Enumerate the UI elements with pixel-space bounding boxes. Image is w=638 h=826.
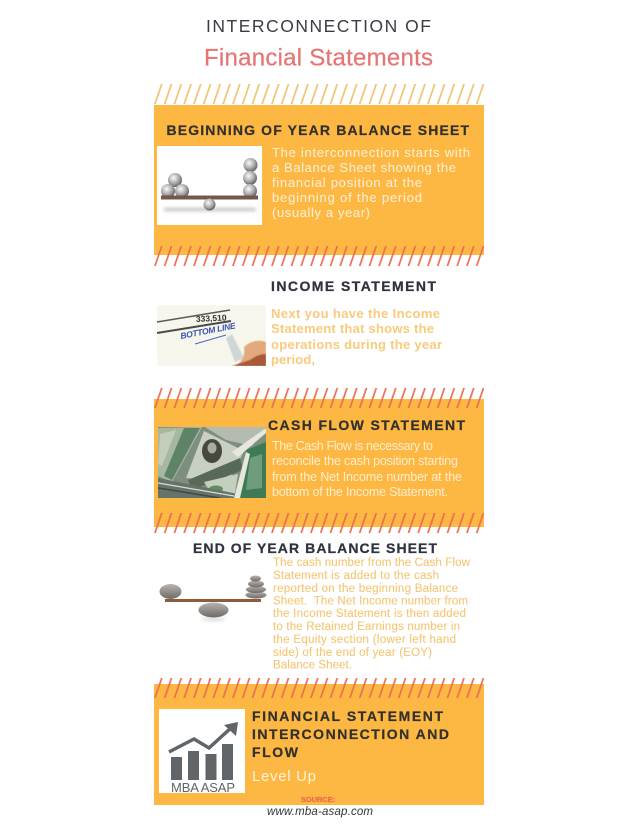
image: stones on a balance — [160, 576, 266, 621]
text: beginning balance sheet description: a Balance Sheet showing the — [272, 160, 456, 175]
heading: financial statement interconnection and flow — [252, 708, 449, 760]
text: income statement description: period, — [271, 352, 315, 367]
text: beginning balance sheet description: financial position at the — [272, 175, 422, 190]
text: cash flow description: The Cash Flow is necessary to — [272, 439, 433, 453]
panel: end of year balance sheet — [160, 540, 471, 672]
logo: MBA ASAP: MBA ASAP — [171, 780, 235, 795]
text: income statement description: Statement that shows the — [271, 321, 434, 336]
text: income statement description — [271, 306, 442, 367]
text: end of year balance sheet description: Balance Sheet. — [273, 660, 352, 672]
text: beginning balance sheet description: beginning of the period — [272, 190, 422, 205]
subheading: level up: Level Up — [252, 768, 316, 785]
text: end of year balance sheet description: the Income Statement is then added — [273, 608, 466, 620]
text: income statement description: operations during the year — [271, 337, 442, 352]
heading: end of year balance sheet: END OF YEAR BALANCE SHEET — [193, 540, 437, 556]
logo: MBA ASAP — [159, 709, 245, 795]
panel: beginning of year balance sheet — [154, 84, 484, 266]
text: end of year balance sheet description: Sheet. The Net Income number from — [273, 596, 468, 608]
infographic — [154, 20, 484, 818]
image: dollar bills — [158, 427, 266, 498]
text: income statement description: Next you have the Income — [271, 306, 440, 321]
text: beginning balance sheet description: The interconnection starts with — [272, 145, 470, 160]
source url: www.mba-asap.com — [267, 806, 373, 818]
heading: financial statement interconnection and flow: INTERCONNECTION AND — [252, 726, 449, 742]
image: bottom line — [157, 305, 266, 366]
title — [204, 16, 433, 72]
image: bottom line: 333,510 — [196, 312, 227, 324]
image: balance with metal balls — [157, 146, 262, 225]
text: beginning balance sheet description — [272, 145, 470, 220]
image: bottom line: BOTTOM LINE — [179, 320, 237, 341]
text: end of year balance sheet description: The cash number from the Cash Flow — [273, 557, 471, 569]
heading: financial statement interconnection and flow: FLOW — [252, 744, 299, 760]
text: beginning balance sheet description: (usually a year) — [272, 205, 370, 220]
text: end of year balance sheet description — [273, 557, 471, 672]
text: cash flow description: from the Net Income number at the — [272, 470, 462, 484]
source label: SOURCE: — [301, 795, 335, 804]
heading: financial statement interconnection and flow: FINANCIAL STATEMENT — [252, 708, 443, 724]
text: end of year balance sheet description: the Equity section (lower left hand — [273, 634, 456, 646]
heading: income statement: INCOME STATEMENT — [271, 278, 436, 294]
text: end of year balance sheet description: to the Retained Earnings number in — [273, 621, 460, 633]
text: cash flow description — [272, 439, 462, 499]
text: cash flow description: reconcile the cash position starting — [272, 454, 458, 468]
text: end of year balance sheet description: reported on the beginning Balance — [273, 583, 458, 595]
title: INTERCONNECTION OF — [206, 16, 431, 36]
heading: cash flow statement: CASH FLOW STATEMENT — [268, 417, 465, 433]
panel: financial statement interconnection and flow — [154, 678, 484, 805]
panel: income statement — [157, 278, 442, 367]
text: end of year balance sheet description: Statement is added to the cash — [273, 570, 439, 582]
title: Financial Statements — [204, 44, 433, 72]
text: cash flow description: bottom of the Income Statement. — [272, 485, 448, 499]
panel: cash flow statement — [154, 388, 484, 533]
text: end of year balance sheet description: side) of the end of year (EOY) — [273, 647, 432, 659]
heading: beginning of year balance sheet: BEGINNING OF YEAR BALANCE SHEET — [166, 122, 469, 138]
